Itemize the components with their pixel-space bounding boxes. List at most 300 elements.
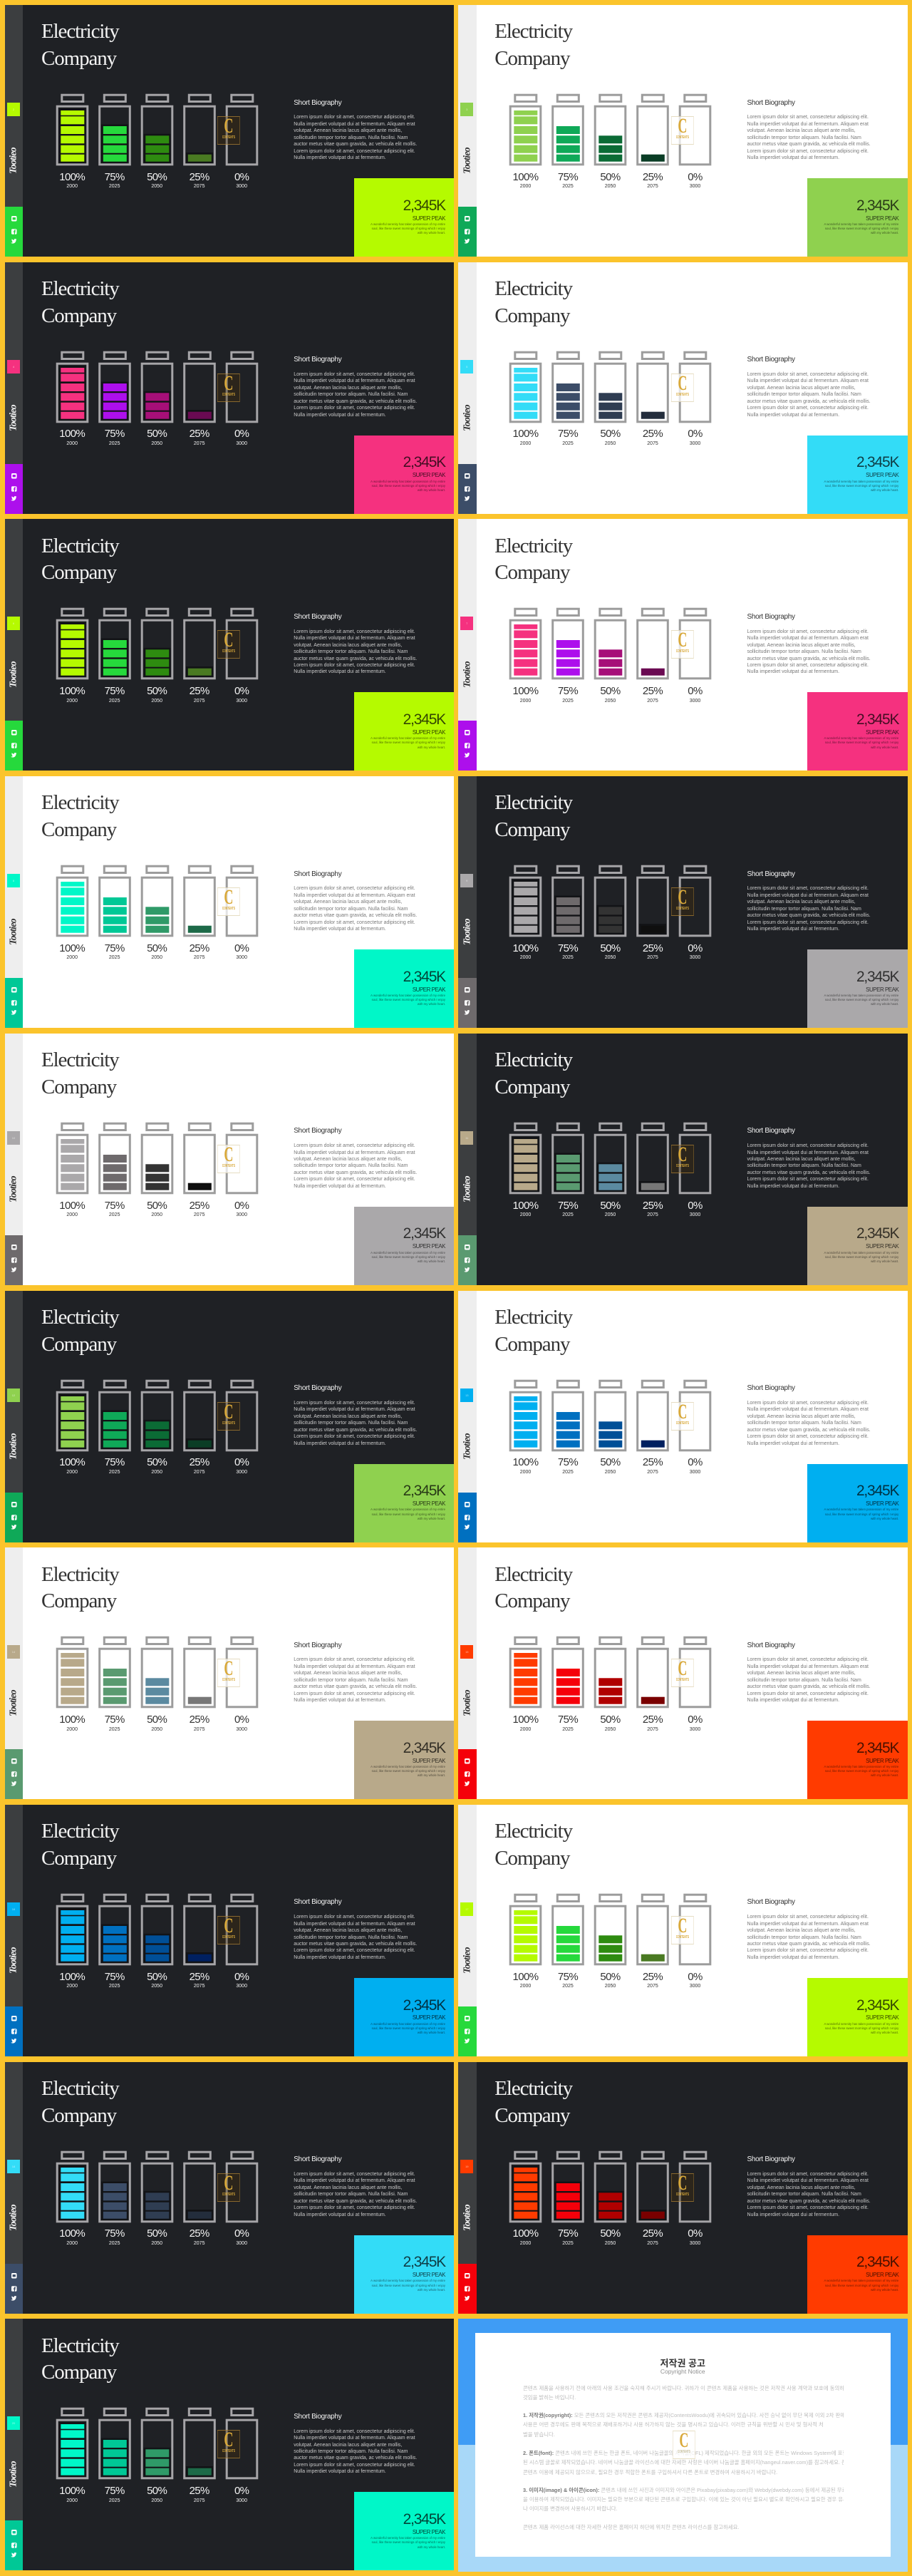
watermark [671, 1659, 693, 1687]
battery chart: 3000 [236, 2498, 247, 2503]
page badge: 2 [13, 108, 14, 111]
stat panel: with my whole heart. [418, 1517, 445, 1520]
panel: slide 5 light cyan: Nulla imperdiet volutpat dui at fermentum. Aliquam erat [747, 378, 869, 383]
section 2 [523, 2448, 844, 2477]
battery labels [513, 171, 703, 189]
page badge [7, 1902, 20, 1916]
battery chart [56, 1122, 258, 1217]
watermark [217, 1916, 240, 1944]
title: Electricity [494, 1049, 572, 1071]
battery chart: 50% [600, 428, 621, 440]
social icons [458, 2264, 476, 2314]
battery chart: 3000 [236, 1470, 247, 1475]
battery chart: 75% [558, 1971, 578, 1983]
title: Company [494, 1590, 569, 1612]
panel: slide 6 dark lime: volutpat. Aenean lacinia lacus aliquet ante mollis, [294, 643, 402, 648]
battery chart: 2050 [605, 2241, 616, 2246]
stat panel: with my whole heart. [418, 1259, 445, 1263]
panel: slide 6 dark lime: Nulla imperdiet volutpat dui at fermentum. [294, 669, 386, 674]
title: Electricity [41, 1049, 119, 1071]
battery chart: 3000 [236, 441, 247, 446]
title [494, 277, 573, 327]
panel: slide 15 light red: Nulla imperdiet volutpat dui at fermentum. Aliquam erat [747, 1664, 869, 1669]
panel: slide 4 dark pink: sollicitudin tempor tortor aliquam. Nulla facilisi. Nam [294, 392, 408, 397]
stat panel: soul, like these sweet mornings of spring which I enjoy [372, 741, 445, 744]
watermark: C [224, 1400, 234, 1423]
battery chart: 25% [643, 685, 663, 697]
sidebar [5, 1547, 23, 1799]
battery chart: 2075 [194, 1212, 204, 1217]
panel: slide 16 dark blue: auctor metus vitae quam gravida, ac vehicula elit mollis. [294, 1942, 417, 1947]
social icons [458, 2006, 476, 2056]
page badge [7, 360, 20, 373]
battery chart: 0% [688, 1456, 703, 1468]
battery chart: 2025 [562, 1212, 574, 1217]
title: Company [494, 47, 569, 70]
stat panel: 2,345K [856, 197, 898, 214]
white card [475, 2333, 891, 2557]
title: Electricity [494, 1820, 572, 1843]
battery labels [458, 1547, 743, 1548]
watermark [671, 2173, 693, 2202]
title: Company [494, 561, 569, 584]
stat panel: A wonderful serenity has taken possession of my entire [824, 2279, 898, 2282]
panel: slide 13 light blue: Lorem ipsum dolor sit amet, consectetur adipiscing elit. [747, 1401, 869, 1406]
title: Company [41, 2104, 116, 2127]
title: Company [41, 1847, 116, 1870]
watermark [217, 1401, 240, 1430]
panel: slide 13 light blue: sollicitudin tempor tortor aliquam. Nulla facilisi. Nam [747, 1421, 861, 1426]
watermark [671, 1145, 693, 1173]
title: Company [494, 2104, 569, 2127]
stat panel: A wonderful serenity has taken possession of my entire [824, 1765, 898, 1768]
panel: slide 9 dark grey: volutpat. Aenean lacinia lacus aliquet ante mollis, [747, 900, 856, 905]
battery chart: 75% [105, 1200, 125, 1212]
stat panel [354, 2492, 455, 2570]
battery chart: 0% [688, 1971, 703, 1983]
panel: slide 14 light tan: volutpat. Aenean lacinia lacus aliquet ante mollis, [294, 1671, 402, 1676]
battery chart: 100% [59, 1971, 85, 1983]
battery chart: 75% [105, 2227, 125, 2240]
stat panel: A wonderful serenity has taken possession of my entire [370, 2022, 445, 2026]
sidebar [458, 1034, 476, 1285]
battery chart: 2025 [109, 1212, 120, 1217]
watermark: C [224, 2171, 234, 2195]
panel: slide 4 dark pink: Nulla imperdiet volutpat dui at fermentum. [294, 413, 386, 418]
stat panel: soul, like these sweet mornings of spring which I enjoy [825, 741, 898, 744]
stat panel: A wonderful serenity has taken possession of my entire [824, 222, 898, 226]
battery chart: 2000 [66, 441, 78, 446]
social icons [458, 721, 476, 771]
page badge [460, 1131, 473, 1145]
battery chart: 0% [688, 428, 703, 440]
biography: Short Biography [294, 870, 341, 878]
section 1: 사용은 어떤 경우에도 판매 목적으로 재배포하거나 사용 허가하지 않는 것을 명시하고 있습니다. 이러한 규칙을 위반할 시 민사 및 형사적 처 [523, 2421, 824, 2428]
watermark: CONTENTS [677, 2450, 690, 2454]
battery chart: 2025 [562, 184, 574, 189]
watermark: C [678, 2171, 687, 2195]
brand: Tootieo [9, 1433, 19, 1459]
biography [294, 1127, 417, 1189]
battery chart: 3000 [690, 441, 700, 446]
stat panel: A wonderful serenity has taken possession of my entire [824, 994, 898, 997]
stat panel [807, 1207, 908, 1285]
notice subtitle: Copyright Notice [660, 2368, 705, 2375]
section 3 [523, 2485, 844, 2514]
battery chart: 3000 [690, 2241, 700, 2246]
battery chart: 3000 [236, 1984, 247, 1989]
panel: slide 3 light green: auctor metus vitae quam gravida, ac vehicula elit mollis. [747, 142, 871, 147]
title: Electricity [41, 2077, 119, 2100]
stat panel [354, 1207, 455, 1285]
page badge: 6 [13, 622, 14, 625]
stat panel: SUPER PEAK [866, 986, 898, 993]
battery chart: 2050 [605, 1212, 616, 1217]
battery chart: 0% [234, 942, 249, 954]
battery chart: 100% [513, 171, 538, 183]
panel: slide 12 dark green: auctor metus vitae quam gravida, ac vehicula elit mollis. [294, 1428, 417, 1433]
panel: slide 16 dark blue: sollicitudin tempor tortor aliquam. Nulla facilisi. Nam [294, 1935, 408, 1940]
panel: slide 3 light green [458, 5, 908, 257]
brand: Tootieo [9, 1947, 19, 1974]
panel: slide 6 dark lime: Lorem ipsum dolor sit amet, consectetur adipiscing elit. [294, 663, 415, 668]
panel: slide 18 dark cyan: Nulla imperdiet volutpat dui at fermentum. Aliquam erat [294, 2178, 415, 2183]
panel: slide 2 dark lime: sollicitudin tempor tortor aliquam. Nulla facilisi. Nam [294, 135, 408, 140]
battery chart: 2000 [520, 1470, 531, 1475]
battery chart: 75% [558, 1456, 578, 1468]
panel: slide 20 dark aqua: Lorem ipsum dolor sit amet, consectetur adipiscing elit. [294, 2429, 415, 2434]
stat panel: soul, like these sweet mornings of spring which I enjoy [825, 1769, 898, 1773]
battery chart: 0% [234, 1200, 249, 1212]
stat panel: A wonderful serenity has taken possession of my entire [370, 222, 445, 226]
watermark: CONTENTS [222, 1935, 235, 1939]
sidebar [5, 262, 23, 514]
battery chart [458, 1547, 743, 1740]
stat panel: SUPER PEAK [413, 1758, 445, 1764]
stat panel: A wonderful serenity has taken possession of my entire [370, 2279, 445, 2282]
stat panel [354, 1978, 455, 2056]
social icons [458, 207, 476, 257]
biography [747, 356, 871, 418]
panel: slide 2 dark lime: Lorem ipsum dolor sit amet, consectetur adipiscing elit. [294, 115, 415, 120]
panel: slide 15 light red [458, 1547, 908, 1799]
watermark [671, 1916, 693, 1944]
stat panel: A wonderful serenity has taken possession of my entire [370, 1508, 445, 1511]
stat panel: A wonderful serenity has taken possession of my entire [824, 736, 898, 740]
biography: Short Biography [294, 1384, 341, 1392]
title: Electricity [41, 2334, 119, 2357]
page badge [460, 874, 473, 887]
battery chart: 2075 [647, 1212, 658, 1217]
panel: slide 20 dark aqua: auctor metus vitae quam gravida, ac vehicula elit mollis. [294, 2456, 417, 2461]
panel: slide 4 dark pink: Lorem ipsum dolor sit amet, consectetur adipiscing elit. [294, 372, 415, 377]
panel: slide 19 dark red: Lorem ipsum dolor sit amet, consectetur adipiscing elit. [747, 2172, 869, 2177]
panel: slide 11 dark tan: sollicitudin tempor tortor aliquam. Nulla facilisi. Nam [747, 1163, 861, 1168]
battery chart [509, 94, 711, 189]
battery chart: 2000 [520, 2241, 531, 2246]
battery chart: 3000 [236, 699, 247, 704]
battery chart: 50% [600, 1714, 621, 1726]
panel: slide 5 light cyan: Nulla imperdiet volutpat dui at fermentum. [747, 413, 839, 418]
stat panel: SUPER PEAK [413, 2272, 445, 2278]
stat panel: 2,345K [403, 1483, 445, 1499]
stat panel: 2,345K [403, 2254, 445, 2270]
panel: slide 8 light aqua: Lorem ipsum dolor sit amet, consectetur adipiscing elit. [294, 920, 415, 925]
biography: Short Biography [294, 1898, 341, 1906]
biography: Short Biography [747, 356, 795, 364]
social icons [5, 1749, 23, 1799]
brand: Tootieo [462, 148, 472, 174]
watermark [217, 2173, 240, 2202]
panel: slide 8 light aqua: Nulla imperdiet volutpat dui at fermentum. [294, 927, 386, 932]
panel: slide 20 dark aqua: Nulla imperdiet volutpat dui at fermentum. [294, 2469, 386, 2474]
title: Electricity [494, 2077, 572, 2100]
battery chart: 25% [190, 942, 209, 954]
biography [294, 1898, 436, 1907]
battery chart: 25% [190, 171, 209, 183]
stat panel: A wonderful serenity has taken possession of my entire [370, 480, 445, 483]
social icons [5, 721, 23, 771]
biography [294, 870, 417, 932]
stat panel: SUPER PEAK [413, 729, 445, 736]
battery chart: 50% [147, 1456, 167, 1468]
sidebar [458, 1547, 476, 1799]
battery chart: 3000 [236, 184, 247, 189]
panel: slide 18 dark cyan: Nulla imperdiet volutpat dui at fermentum. [294, 2212, 386, 2217]
stat panel: 2,345K [403, 969, 445, 985]
title: Company [41, 818, 116, 841]
battery chart: 2000 [66, 1470, 78, 1475]
brand: Tootieo [462, 919, 472, 945]
social icons [5, 978, 23, 1028]
watermark: CONTENTS [675, 649, 688, 654]
battery chart: 2000 [520, 1727, 531, 1732]
stat panel [354, 178, 455, 257]
panel: slide 19 dark red: volutpat. Aenean lacinia lacus aliquet ante mollis, [747, 2185, 856, 2190]
battery chart: 2025 [562, 955, 574, 960]
stat panel [354, 1464, 455, 1542]
battery chart: 2075 [194, 2498, 204, 2503]
watermark: CONTENTS [675, 1935, 688, 1939]
panel: slide 16 dark blue [5, 1805, 454, 2056]
section 2: 2. 폰트(font): 콘텐츠 내에 쓰인 폰트는 한글 폰트, 네이버 나눔글꼴의 저작물(OFL) 제작되었습니다. 한글 외의 모든 폰트는 Windows System에 포함 [523, 2450, 844, 2456]
sidebar [5, 1290, 23, 1542]
battery chart: 3000 [690, 184, 700, 189]
stat panel: A wonderful serenity has taken possession of my entire [824, 480, 898, 483]
stat panel: with my whole heart. [418, 231, 445, 235]
stat panel: with my whole heart. [418, 2031, 445, 2034]
battery chart: 2075 [647, 184, 658, 189]
battery chart: 2075 [194, 2241, 204, 2246]
battery chart: 2050 [605, 1470, 616, 1475]
watermark: CONTENTS [675, 1678, 688, 1682]
stat panel: A wonderful serenity has taken possession of my entire [370, 1251, 445, 1254]
brand: Tootieo [9, 2461, 19, 2488]
social icons [5, 1493, 23, 1542]
battery chart: 100% [59, 428, 85, 440]
stat panel: A wonderful serenity has taken possession of my entire [824, 1251, 898, 1254]
stat panel: with my whole heart. [871, 488, 898, 492]
battery chart: 2000 [66, 2241, 78, 2246]
panel: slide 9 dark grey: Nulla imperdiet volutpat dui at fermentum. [747, 927, 839, 932]
panel: slide 6 dark lime: sollicitudin tempor tortor aliquam. Nulla facilisi. Nam [294, 649, 408, 654]
panel: slide 16 dark blue: Lorem ipsum dolor sit amet, consectetur adipiscing elit. [294, 1915, 415, 1920]
stat panel: SUPER PEAK [413, 472, 445, 478]
sidebar [5, 2319, 23, 2570]
battery chart: 100% [513, 1200, 538, 1212]
biography: Short Biography [747, 1898, 795, 1906]
panel: slide 9 dark grey: sollicitudin tempor tortor aliquam. Nulla facilisi. Nam [747, 907, 861, 912]
panel: slide 15 light red: sollicitudin tempor tortor aliquam. Nulla facilisi. Nam [747, 1678, 861, 1683]
stat panel [807, 1978, 908, 2056]
social icons [5, 2520, 23, 2570]
battery chart: 50% [147, 2485, 167, 2497]
panel: slide 13 light blue: Nulla imperdiet volutpat dui at fermentum. [747, 1441, 839, 1446]
panel: slide 13 light blue: volutpat. Aenean lacinia lacus aliquet ante mollis, [747, 1414, 856, 1419]
stat panel [354, 692, 455, 771]
panel: slide 18 dark cyan: Lorem ipsum dolor sit amet, consectetur adipiscing elit. [294, 2172, 415, 2177]
intro text: 콘텐츠 제품을 사용하기 전에 아래의 사용 조건을 숙지해 주시기 바랍니다. 귀하가 이 콘텐츠 제품을 사용하는 것은 저작권 사용 계약과 보호에 동의하는 [523, 2385, 844, 2391]
panel: slide 13 light blue: Lorem ipsum dolor sit amet, consectetur adipiscing elit. [747, 1434, 869, 1439]
panel: slide 10 light grey: auctor metus vitae quam gravida, ac vehicula elit mollis. [294, 1170, 417, 1175]
battery labels [5, 2061, 290, 2063]
page badge [7, 2160, 20, 2173]
panel: slide 12 dark green: volutpat. Aenean lacinia lacus aliquet ante mollis, [294, 1414, 402, 1419]
panel: slide 17 light lime: Nulla imperdiet volutpat dui at fermentum. [747, 1955, 839, 1960]
battery chart: 50% [600, 1456, 621, 1468]
battery chart: 50% [600, 942, 621, 954]
battery chart: 2025 [109, 184, 120, 189]
watermark: CONTENTS [222, 135, 235, 140]
watermark: C [224, 885, 234, 909]
battery chart: 75% [105, 428, 125, 440]
title: Company [494, 1076, 569, 1098]
battery chart: 2000 [520, 1212, 531, 1217]
panel: slide 8 light aqua: Lorem ipsum dolor sit amet, consectetur adipiscing elit. [294, 886, 415, 891]
title: Company [41, 304, 116, 327]
panel: slide 13 light blue: Nulla imperdiet volutpat dui at fermentum. Aliquam erat [747, 1407, 869, 1412]
battery chart: 2025 [562, 1984, 574, 1989]
title [494, 791, 573, 841]
stat panel: SUPER PEAK [866, 1243, 898, 1250]
battery chart: 3000 [236, 2241, 247, 2246]
stat panel: 2,345K [856, 1997, 898, 2014]
panel: slide 7 light pink: Nulla imperdiet volutpat dui at fermentum. Aliquam erat [747, 636, 869, 641]
battery chart [56, 607, 258, 704]
panel: slide 14 light tan: Lorem ipsum dolor sit amet, consectetur adipiscing elit. [294, 1657, 415, 1662]
stat panel: SUPER PEAK [866, 729, 898, 736]
biography: Short Biography [294, 1127, 341, 1135]
stat panel: SUPER PEAK [413, 986, 445, 993]
battery chart: 2050 [151, 1212, 162, 1217]
battery chart: 50% [600, 1971, 621, 1983]
battery chart: 2075 [647, 1470, 658, 1475]
stat panel: SUPER PEAK [413, 2014, 445, 2021]
page badge: 13 [465, 1393, 469, 1397]
battery labels [513, 1200, 703, 1217]
panel: slide 4 dark pink: Nulla imperdiet volutpat dui at fermentum. Aliquam erat [294, 378, 415, 383]
panel: slide 12 dark green: Nulla imperdiet volutpat dui at fermentum. Aliquam erat [294, 1407, 415, 1412]
stat panel: soul, like these sweet mornings of spring which I enjoy [372, 1255, 445, 1259]
watermark: C [678, 114, 687, 138]
panel: slide 17 light lime: Lorem ipsum dolor sit amet, consectetur adipiscing elit. [747, 1948, 869, 1953]
stat panel [354, 949, 455, 1028]
battery chart: 100% [59, 2485, 85, 2497]
stat panel: with my whole heart. [871, 2288, 898, 2292]
watermark: CONTENTS [222, 649, 235, 654]
page badge [7, 1131, 20, 1145]
battery chart: 2050 [605, 1984, 616, 1989]
watermark: C [679, 2428, 688, 2452]
sidebar [458, 5, 476, 257]
battery chart: 2000 [66, 184, 78, 189]
panel: slide 17 light lime: volutpat. Aenean lacinia lacus aliquet ante mollis, [747, 1928, 856, 1933]
stat panel: 2,345K [403, 1997, 445, 2014]
panel: slide 17 light lime: Nulla imperdiet volutpat dui at fermentum. Aliquam erat [747, 1922, 869, 1927]
panel: slide 9 dark grey [458, 776, 908, 1028]
title: Company [41, 1590, 116, 1612]
watermark: CONTENTS [222, 907, 235, 911]
sidebar [458, 519, 476, 771]
sidebar [5, 1034, 23, 1285]
closing text: 콘텐츠 제품 라이선스에 대한 자세한 사항은 홈페이지 하단에 위치한 콘텐츠 라이선스를 참고하세요. [523, 2524, 739, 2530]
sidebar [5, 776, 23, 1028]
panel: slide 15 light red: volutpat. Aenean lacinia lacus aliquet ante mollis, [747, 1671, 856, 1676]
stat panel: 2,345K [403, 454, 445, 470]
stat panel: with my whole heart. [418, 2545, 445, 2549]
section 1: 벌을 받습니다. [523, 2431, 555, 2438]
stat panel: 2,345K [856, 1225, 898, 1242]
stat panel: with my whole heart. [418, 1002, 445, 1006]
panel: slide 7 light pink: auctor metus vitae quam gravida, ac vehicula elit mollis. [747, 656, 871, 661]
stat panel: 2,345K [856, 1740, 898, 1756]
title: Company [41, 1333, 116, 1356]
biography [747, 1384, 889, 1393]
battery labels [5, 2318, 290, 2319]
brand: Tootieo [9, 1690, 19, 1716]
panel: slide 19 dark red: Nulla imperdiet volutpat dui at fermentum. Aliquam erat [747, 2178, 869, 2183]
stat panel: SUPER PEAK [413, 2529, 445, 2535]
battery chart [5, 2062, 290, 2255]
watermark: C [678, 1914, 687, 1937]
panel: slide 3 light green: Lorem ipsum dolor sit amet, consectetur adipiscing elit. [747, 149, 869, 154]
battery chart: 3000 [690, 1984, 700, 1989]
battery chart: 100% [513, 428, 538, 440]
notice title: 저작권 공고 [660, 2358, 705, 2369]
intro text [523, 2384, 844, 2402]
panel: slide 7 light pink: volutpat. Aenean lacinia lacus aliquet ante mollis, [747, 643, 856, 648]
battery chart: 2000 [520, 441, 531, 446]
title: Electricity [41, 791, 119, 814]
social icons [5, 2006, 23, 2056]
panel: slide 12 dark green [5, 1290, 454, 1542]
panel: slide 8 light aqua: auctor metus vitae quam gravida, ac vehicula elit mollis. [294, 913, 417, 918]
page badge: 19 [465, 2165, 469, 2168]
battery chart: 100% [59, 1456, 85, 1468]
battery chart: 25% [643, 171, 663, 183]
stat panel: A wonderful serenity has taken possession of my entire [370, 994, 445, 997]
battery chart: 2075 [647, 441, 658, 446]
battery chart: 2050 [151, 441, 162, 446]
watermark: C [224, 114, 234, 138]
stat panel: soul, like these sweet mornings of spring which I enjoy [372, 998, 445, 1001]
title [41, 2076, 119, 2129]
watermark: CONTENTS [675, 2193, 688, 2197]
battery chart: 0% [234, 171, 249, 183]
battery chart [458, 1290, 743, 1483]
stat panel: with my whole heart. [871, 1259, 898, 1263]
watermark: CONTENTS [222, 2449, 235, 2453]
